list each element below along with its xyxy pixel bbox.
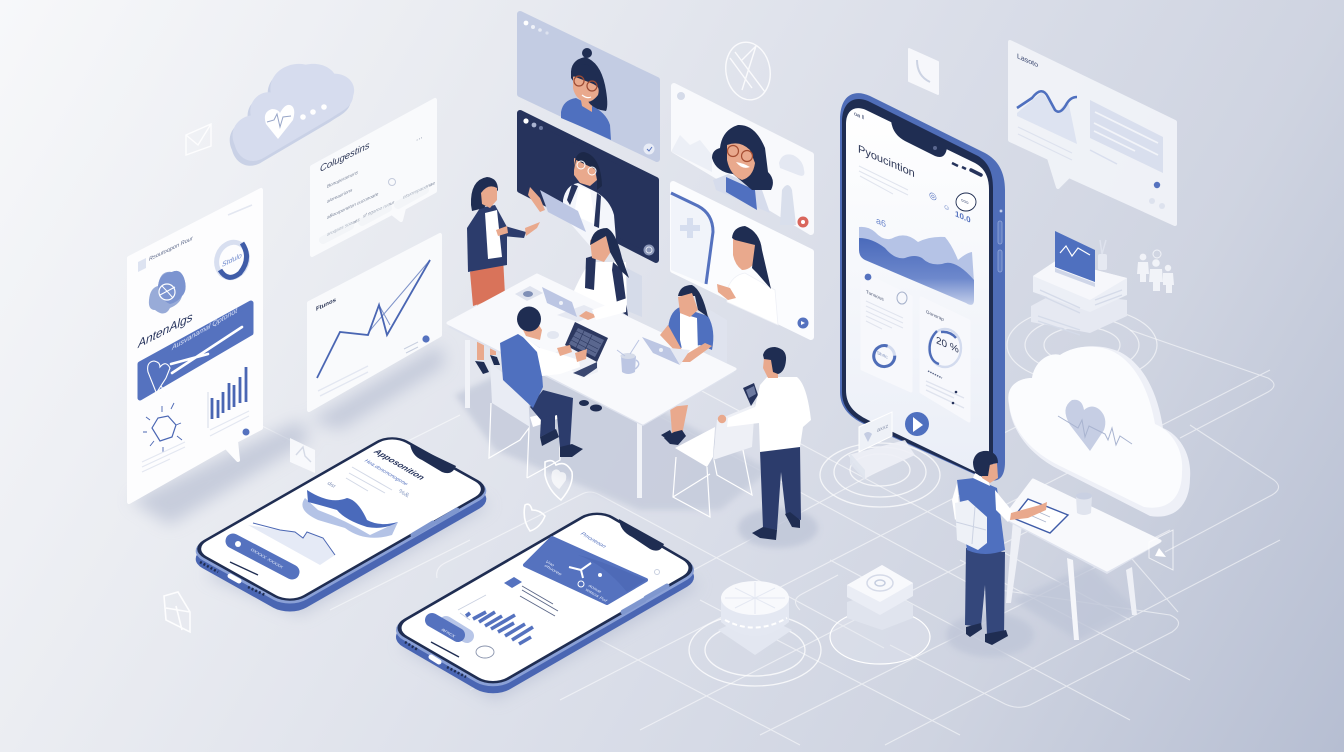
blue feature card: ohuoree xyxy=(543,564,563,576)
chair: right xyxy=(673,404,755,517)
heading: AntenAlgs xyxy=(137,309,193,351)
play button xyxy=(905,412,929,436)
person: man seated at front xyxy=(500,306,587,457)
icon: faint envelope tile xyxy=(186,124,211,155)
indicators: 10.0 xyxy=(955,208,971,225)
phone: flat left xyxy=(186,432,496,617)
card: right gauge: 20 % xyxy=(936,335,959,356)
blue feature card: wasos Pof xyxy=(584,588,609,603)
panel: video call lavender xyxy=(520,14,657,159)
indicators xyxy=(929,188,971,225)
bar chart xyxy=(458,595,533,644)
icon: people group xyxy=(1137,250,1174,293)
card: right gauge xyxy=(921,298,969,421)
person: man with tablet xyxy=(718,347,811,540)
big upright phone xyxy=(840,93,1005,481)
icon: coffee cup on table xyxy=(547,331,639,374)
list rows: osuorepaoonae xyxy=(403,180,435,201)
card: right gauge: Gonorap xyxy=(926,309,944,323)
blue feature card: Vno xyxy=(544,560,556,567)
server stack with monitor xyxy=(1007,231,1157,383)
table legs and far chairs xyxy=(465,267,727,498)
soft shadows xyxy=(130,345,700,700)
icon: heart xyxy=(1065,400,1105,451)
area chart xyxy=(248,523,335,565)
indicators: ◎ xyxy=(929,188,937,202)
big upright phone: a6 xyxy=(876,214,886,229)
title: Pmoneoon xyxy=(578,532,607,549)
list rows xyxy=(327,169,435,238)
desk xyxy=(1005,480,1173,640)
button: oxxxx xxxxx xyxy=(249,548,284,570)
button xyxy=(432,620,467,639)
notch xyxy=(410,444,456,473)
blue feature card: aosue xyxy=(587,584,603,594)
person: presenter with laptop xyxy=(528,152,616,246)
person: woman with bun xyxy=(561,48,611,140)
panel: top right chart bubble xyxy=(1010,42,1175,224)
list rows: aloreaurions xyxy=(327,187,353,205)
button xyxy=(233,541,292,572)
subtitle lines: Hoa.donononogone xyxy=(362,459,409,486)
donut gauge xyxy=(212,238,252,282)
floor box stack device xyxy=(830,565,930,664)
laptop: right silver xyxy=(642,337,690,365)
wave graphic xyxy=(302,490,398,538)
person: center woman xyxy=(568,228,629,320)
icon: heart outlines xyxy=(524,461,572,531)
table top xyxy=(448,275,735,426)
list rows: aBoorponeton cuconoate xyxy=(327,191,379,221)
line chart xyxy=(1017,91,1077,160)
card: left donut: Tunoous xyxy=(866,289,884,303)
paper on table xyxy=(515,286,543,301)
figure floor shadows xyxy=(738,508,1137,657)
icon: cloud with heart xyxy=(230,64,354,166)
icon: corner bracket tile xyxy=(164,592,190,632)
big upright phone: ooo xyxy=(961,197,969,205)
large cloud with heart xyxy=(1008,346,1190,517)
heading: Colugestins xyxy=(320,140,370,175)
header xyxy=(138,205,252,272)
blue banner: Ausvanamal Qptonot xyxy=(171,305,238,352)
panel: collaboration list: ... xyxy=(416,130,423,143)
floor device with rings xyxy=(820,412,940,507)
phone: flat left: %& xyxy=(397,488,411,499)
icon: phone tile xyxy=(909,49,938,94)
text block xyxy=(1090,100,1163,173)
button: arxcx xyxy=(440,628,457,639)
standing woman legs xyxy=(475,300,500,374)
panel: collaboration list xyxy=(312,100,435,255)
list rows: aroqaos sooaes xyxy=(327,217,360,238)
bar chart xyxy=(208,367,249,436)
card: left donut: Shrtc xyxy=(877,350,888,361)
label: Ftunos xyxy=(316,296,336,313)
title: Apposonition xyxy=(371,448,428,481)
floor device with rings: axxz xyxy=(877,424,888,434)
person: smiling woman xyxy=(712,125,773,213)
lines xyxy=(317,260,430,378)
floor cylinder device xyxy=(689,581,821,686)
phone: flat right xyxy=(386,507,704,699)
indicators: ☺ xyxy=(943,201,950,213)
person: standing woman xyxy=(467,177,540,306)
panel: video call dark xyxy=(520,113,656,260)
list rows: sf ngaroo ruour xyxy=(363,200,394,220)
subtitle lines xyxy=(346,459,409,493)
mug xyxy=(1076,496,1092,515)
icon: sun hexagon xyxy=(143,403,182,452)
person: seated woman right xyxy=(660,285,713,362)
laptop: center silver xyxy=(542,287,627,322)
blue banner xyxy=(140,303,251,398)
donut gauge: Stdulo xyxy=(222,251,242,269)
card: left donut xyxy=(862,273,911,391)
person: man with ponytail xyxy=(717,226,778,325)
icon: zigzag tile xyxy=(290,438,315,473)
small icons: dsr xyxy=(326,481,337,490)
panel: line chart xyxy=(309,235,440,410)
list rows: Bonoperamons xyxy=(327,169,359,190)
heading: Pyoucintion xyxy=(858,143,915,180)
tablet xyxy=(1013,499,1068,533)
chair: front xyxy=(489,363,563,478)
table floor shadow xyxy=(455,350,770,510)
icon: crossed circle outline xyxy=(721,39,775,103)
backpack xyxy=(955,500,987,550)
panel: video call white woman with glasses xyxy=(672,86,811,232)
text block xyxy=(504,577,558,616)
notch xyxy=(891,120,947,157)
floor grid lines xyxy=(190,330,1280,745)
panel: left dashboard xyxy=(129,190,261,502)
status: oa ‖ xyxy=(854,111,864,122)
person: man at desk with backpack xyxy=(952,451,1047,645)
blue feature card xyxy=(525,538,646,603)
header: Rsoutoopon Rour xyxy=(149,235,194,263)
label: Lasoto xyxy=(1017,51,1038,69)
area wave chart xyxy=(859,227,974,305)
side buttons xyxy=(998,210,1002,272)
icon: blue cloud with globe xyxy=(149,271,186,314)
laptop: dark front xyxy=(552,322,608,378)
notch xyxy=(619,519,664,551)
monitor xyxy=(1055,231,1095,282)
panel: video call white man with plus card xyxy=(671,184,811,337)
